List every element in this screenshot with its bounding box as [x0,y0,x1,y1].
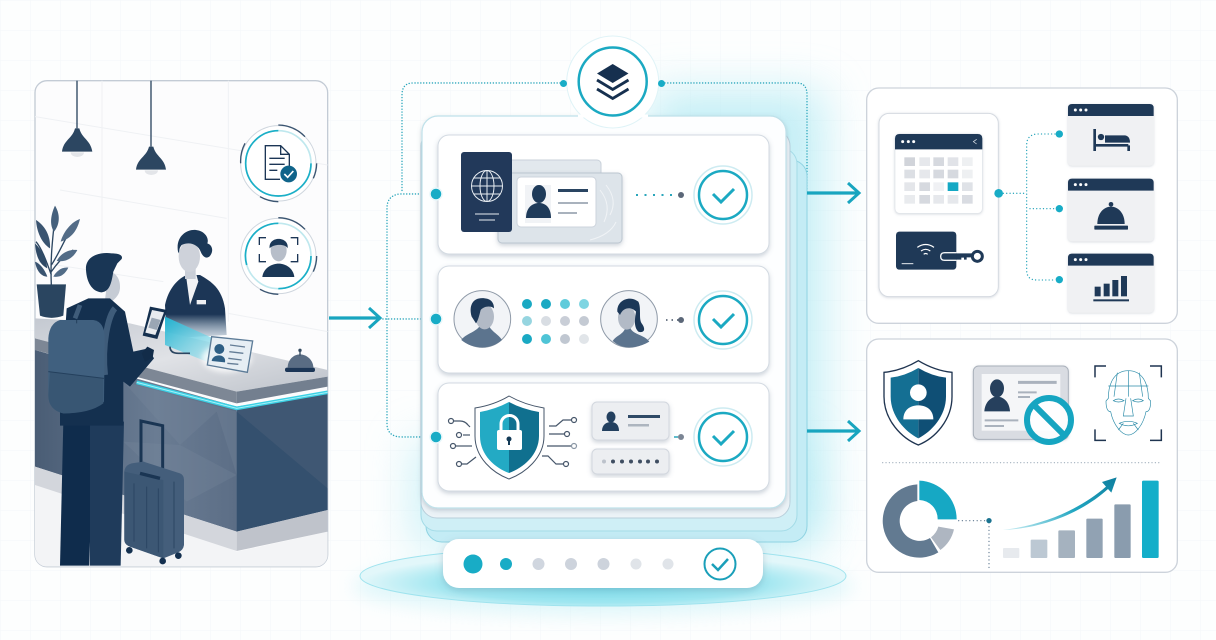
window: concierge [1068,179,1154,241]
inner card [879,113,998,297]
window: analytics [1068,254,1154,313]
desk stand [170,347,190,353]
icon: document verified badge [241,125,317,202]
front card [422,116,786,508]
arrow: verification to services [807,183,859,203]
scanner beam [165,317,213,362]
panel: hotel services [867,88,1177,323]
icon: check badge [694,291,752,349]
connector dots at layers badge [560,80,665,87]
receptionist [165,230,227,338]
callout connector [959,518,992,570]
branch connectors [1003,134,1055,280]
panel: security and analytics [867,339,1177,572]
icon: shield with lock [475,396,544,479]
icon: face mesh scan [1095,366,1161,440]
phone [143,307,167,339]
icon: id card blocked [973,366,1071,442]
id card on desk [202,337,253,372]
icon: check [704,548,736,580]
glow behind verification stack [410,90,825,550]
suitcase [124,421,184,564]
password field [592,449,669,474]
icon: check badge [694,166,752,224]
user field [592,402,669,440]
icon: passport [461,152,512,232]
arrow: desk to verification [329,308,380,328]
growth arrow [1003,477,1117,530]
connector lines [380,83,807,437]
floor [35,465,328,567]
icon: plant [35,206,80,318]
icon: key card [896,232,982,270]
connector dots [430,188,442,443]
dot matrix [522,299,589,344]
arrow: verification to analytics [807,421,859,441]
card: security check [438,383,769,491]
panel: hotel front desk scene [35,81,328,567]
icon: service bell [285,349,315,372]
stacked back layers [421,130,807,542]
traveller [48,253,167,566]
platform ellipse [353,546,853,616]
donut chart [883,481,957,558]
lamp right [136,81,166,175]
panel: verification stack [421,116,807,542]
icon: female portrait [601,291,657,347]
card: document check [438,135,769,254]
lamp left [62,81,92,157]
counter [35,318,328,551]
card: face match [438,266,769,373]
icon: male portrait [454,291,511,347]
icon: calendar [895,134,982,213]
icon: check badge [694,408,752,466]
progress bar [443,539,763,588]
window: room [1068,104,1154,166]
icon: guest shield [884,361,952,445]
bar chart [1003,481,1159,558]
icon: face scan badge [241,218,317,294]
backpack [48,305,115,413]
divider [883,461,1162,465]
circuit lines [448,418,576,466]
icon: id cards [498,160,622,243]
icon: layers badge [567,36,659,128]
